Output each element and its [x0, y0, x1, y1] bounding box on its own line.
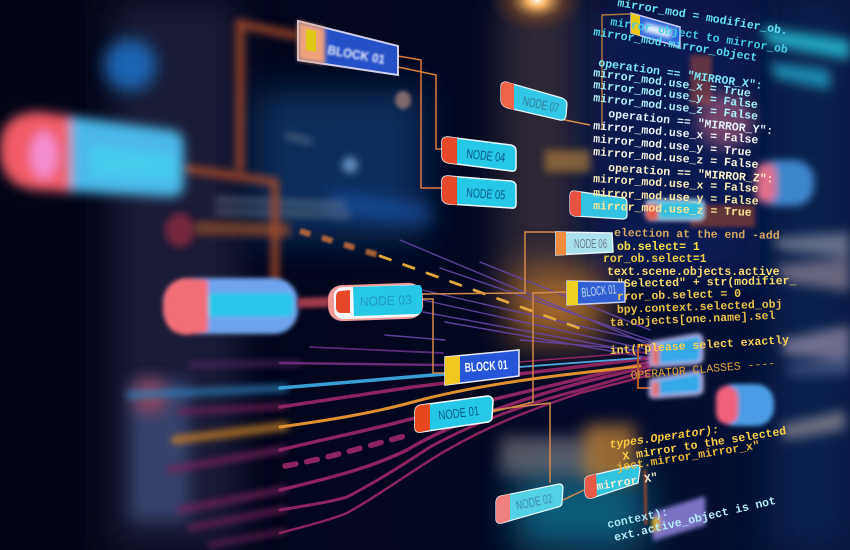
node 04: NODE 04 [466, 146, 506, 165]
code text panel: rror_ob.select = 0 [617, 288, 741, 304]
code text panel: ob.select= 1 [617, 241, 700, 254]
block top: blurred block 01 [298, 21, 398, 75]
right blurred pill [756, 160, 814, 206]
blurred pills in the code area [646, 200, 774, 541]
block 02, right: BLOCK 01 [581, 281, 617, 300]
node 03 [298, 282, 424, 322]
code text panel: mirror_mod.mirror_object [592, 26, 758, 65]
block 01 [445, 350, 519, 385]
data line spray converging to the right [130, 240, 650, 545]
code text panel: election at the end -add [614, 227, 780, 243]
blurred background text strips [215, 135, 350, 215]
node 04 [442, 137, 516, 171]
code text panel: operation == "MIRROR_Y": [608, 108, 774, 138]
code text panel: mirror_mod.use_z = True [593, 200, 752, 220]
purple upper rays [385, 240, 650, 358]
blurred right-hand streaks [760, 27, 850, 440]
blurred foreground connector lines [182, 24, 298, 285]
flare at top of the image [489, 0, 585, 34]
magenta rays [280, 347, 650, 533]
blurred pill, middle [163, 278, 298, 335]
node 07 (top): NODE 07 [521, 93, 561, 116]
node at lower right [585, 465, 640, 498]
node 06: NODE 06 [574, 236, 607, 251]
code text panel: text.scene.objects.active [607, 266, 780, 279]
block 02, right [567, 281, 625, 305]
code text panel: mirror_mod.use_z = False [593, 146, 759, 172]
code text panel: mirror_mod.use_x = False [593, 120, 759, 147]
code text panel: types.Operator): [609, 424, 720, 452]
code text panel: ext.active_object is not [613, 495, 777, 545]
code text panel: mirror_mod.use_y = True [593, 133, 752, 160]
blurred left part of the rays [130, 363, 300, 545]
code text panel: ror_ob.select=1 [603, 253, 707, 266]
code text panel: operation == "MIRROR_Z": [608, 162, 774, 187]
code text panel: "Selected" + str(modifier_ [617, 275, 797, 291]
code text panel [592, 0, 797, 545]
node 06 [556, 232, 613, 255]
node 02 [496, 484, 563, 523]
node 07 (top) [501, 82, 567, 120]
code text panel: ject.mirror_mirror_x" [616, 439, 761, 475]
blue ray [280, 374, 445, 388]
large blurred pill, left [0, 112, 184, 197]
code text panel: int("please select exactly [609, 334, 789, 358]
code text panel: mirror_mod.use_z = False [593, 92, 759, 124]
small block, top of code [631, 13, 680, 47]
code text panel: operation == "MIRROR_X": [597, 57, 763, 93]
code text panel: mirror_mod.use_x = True [592, 67, 752, 101]
node 06 top-right row [570, 191, 627, 219]
code text panel: X mirror to the selected [622, 425, 787, 464]
orange ray [280, 366, 640, 427]
node 01: NODE 01 [438, 403, 480, 423]
connector lines between nodes [398, 14, 652, 525]
node 05 [442, 176, 516, 208]
code text panel: mirror object to mirror_ob [609, 16, 789, 57]
code text panel: mirror X" [596, 471, 659, 494]
code text panel: mirror_mod.use_y = False [593, 187, 759, 209]
node 02: NODE 02 [515, 491, 554, 513]
dashed orange ray [380, 256, 590, 332]
dashed magenta ray [285, 436, 405, 466]
node 01 [415, 396, 493, 432]
code text panel: mirror_mod.use_y = False [593, 79, 759, 112]
code text panel: OPERATOR CLASSES ---- [630, 357, 776, 383]
block top: blurred block 01: BLOCK 01 [326, 42, 386, 67]
block 01: BLOCK 01 [464, 357, 508, 375]
node 05: NODE 05 [466, 185, 506, 202]
code text panel: mirror_mod.use_x = False [593, 173, 759, 196]
code text panel: bpy.context.selected_obj [617, 298, 783, 317]
code text panel: ta.objects[one.name].sel [610, 310, 776, 330]
node 03: NODE 03 [360, 292, 412, 309]
code text panel: context): [606, 506, 670, 532]
